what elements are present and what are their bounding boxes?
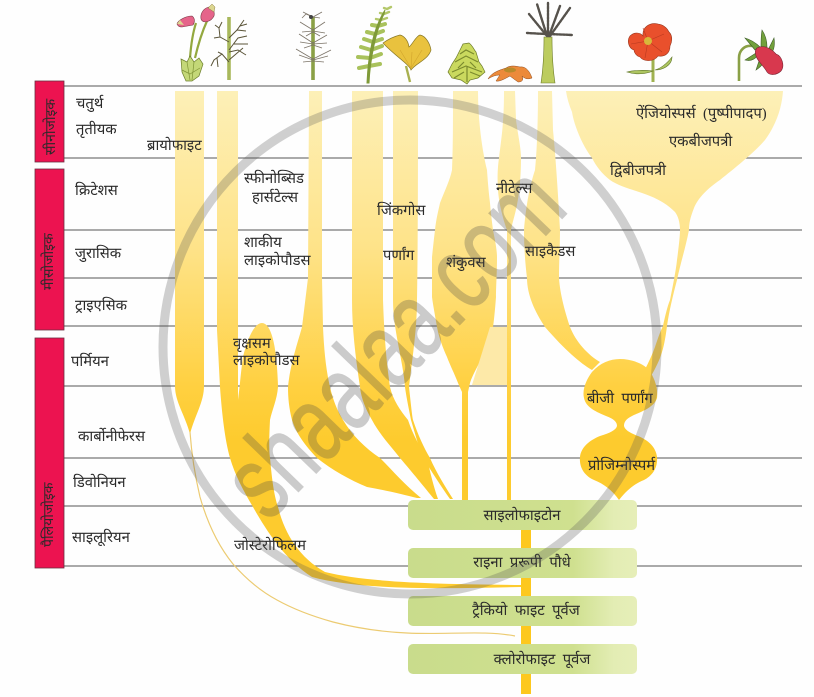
era bars <box>35 81 64 568</box>
plant group labels: जोस्टेरोफिलम <box>234 536 307 554</box>
period labels: कार्बोनीफेरस <box>78 427 146 445</box>
plant group labels: साइकैडस <box>525 242 576 260</box>
evolutionary tree bands <box>175 91 783 636</box>
plant group labels: वृक्षसम <box>233 336 272 352</box>
era: Mesozoic: मीसोजोइक <box>40 233 57 290</box>
band: bryophytes <box>175 91 515 636</box>
plant illustrations <box>177 2 783 84</box>
era: Paleozoic: पैलियोजोइक <box>40 482 57 547</box>
plant group labels: ब्रायोफाइट <box>147 136 202 154</box>
plant group labels: शंकुवस <box>446 254 487 271</box>
box: psilophyton <box>408 500 637 530</box>
era: Mesozoic <box>35 169 64 330</box>
icon: red poppy <box>627 24 672 82</box>
band: conifers <box>432 91 497 500</box>
period labels: ट्राइएसिक <box>75 296 128 314</box>
timeline grid lines <box>64 86 802 566</box>
era: Cenozoic: सीनोजोइक <box>42 99 59 155</box>
band: cycads <box>524 91 600 370</box>
icon: pine cone <box>448 43 485 84</box>
era: Cenozoic <box>35 81 64 162</box>
box: tracheophyte ancestors <box>408 596 637 626</box>
band: seed ferns and progymnosperms <box>580 359 657 500</box>
plant group labels: प्रोजिम्नोस्पर्म <box>588 456 656 474</box>
icon: horsetail <box>296 12 331 80</box>
green ancestor boxes <box>408 500 637 674</box>
icon: ginkgo leaf <box>383 35 431 82</box>
plant group labels: शाकीय <box>244 233 282 251</box>
period labels: पर्मियन <box>71 352 110 370</box>
plant group labels: स्फीनोब्सिड <box>244 169 305 187</box>
plant group labels: द्विबीजपत्री <box>610 161 667 179</box>
plant group labels <box>147 104 767 554</box>
plant group labels: एकबीजपत्री <box>669 132 733 150</box>
band: sphenopsids <box>288 91 421 498</box>
box: psilophyton: साइलोफाइटोन <box>484 506 561 524</box>
icon: palm plant <box>527 2 572 83</box>
band: conifer pale wedge <box>472 327 507 385</box>
icon: moss <box>177 4 215 81</box>
band: ginkgos <box>393 91 453 499</box>
period labels <box>71 94 146 547</box>
plant group labels: पर्णांग <box>383 246 415 264</box>
period labels: जुरासिक <box>75 244 122 262</box>
period labels: साइलूरियन <box>72 528 131 547</box>
band: gnetales <box>498 91 521 500</box>
icon: fern frond <box>358 7 391 83</box>
period labels: तृतीयक <box>76 120 117 138</box>
period labels: चतुर्थ <box>76 94 104 112</box>
icon: orange flower <box>488 66 532 82</box>
plant group labels: बीजी पर्णांग <box>587 389 653 407</box>
band: ferns <box>352 91 438 499</box>
box: rhynia-type plants: राइना प्ररूपी पौधे <box>473 553 572 571</box>
box: chlorophyte ancestors: क्लोरोफाइट पूर्वज <box>494 650 591 669</box>
box: chlorophyte ancestors <box>408 644 637 674</box>
plant group labels: हार्सटेल्स <box>252 188 299 206</box>
plant group labels: लाइकोपौडस <box>233 351 300 369</box>
period labels: डिवोनियन <box>73 473 126 491</box>
box: rhynia-type plants <box>408 548 637 578</box>
band: angiosperms <box>566 91 783 386</box>
watermark: shaalaa.com <box>199 143 587 539</box>
plant group labels: जिंकगोस <box>377 201 426 219</box>
icon: branching plant <box>211 17 248 80</box>
band: lycopods and zosterophyllum <box>217 91 521 588</box>
plant group labels: ऐंजियोस्पर्स (पुष्पीपादप) <box>636 104 767 122</box>
era: Paleozoic <box>35 338 64 568</box>
central stem <box>521 528 531 694</box>
period labels: क्रिटेशस <box>75 181 119 199</box>
box: tracheophyte ancestors: ट्रैकियो फाइट पूर्वज <box>472 601 581 620</box>
plant group labels: नीटेल्स <box>496 179 533 197</box>
plant group labels: लाइकोपौडस <box>244 251 311 269</box>
icon: red bell flower <box>739 30 783 81</box>
